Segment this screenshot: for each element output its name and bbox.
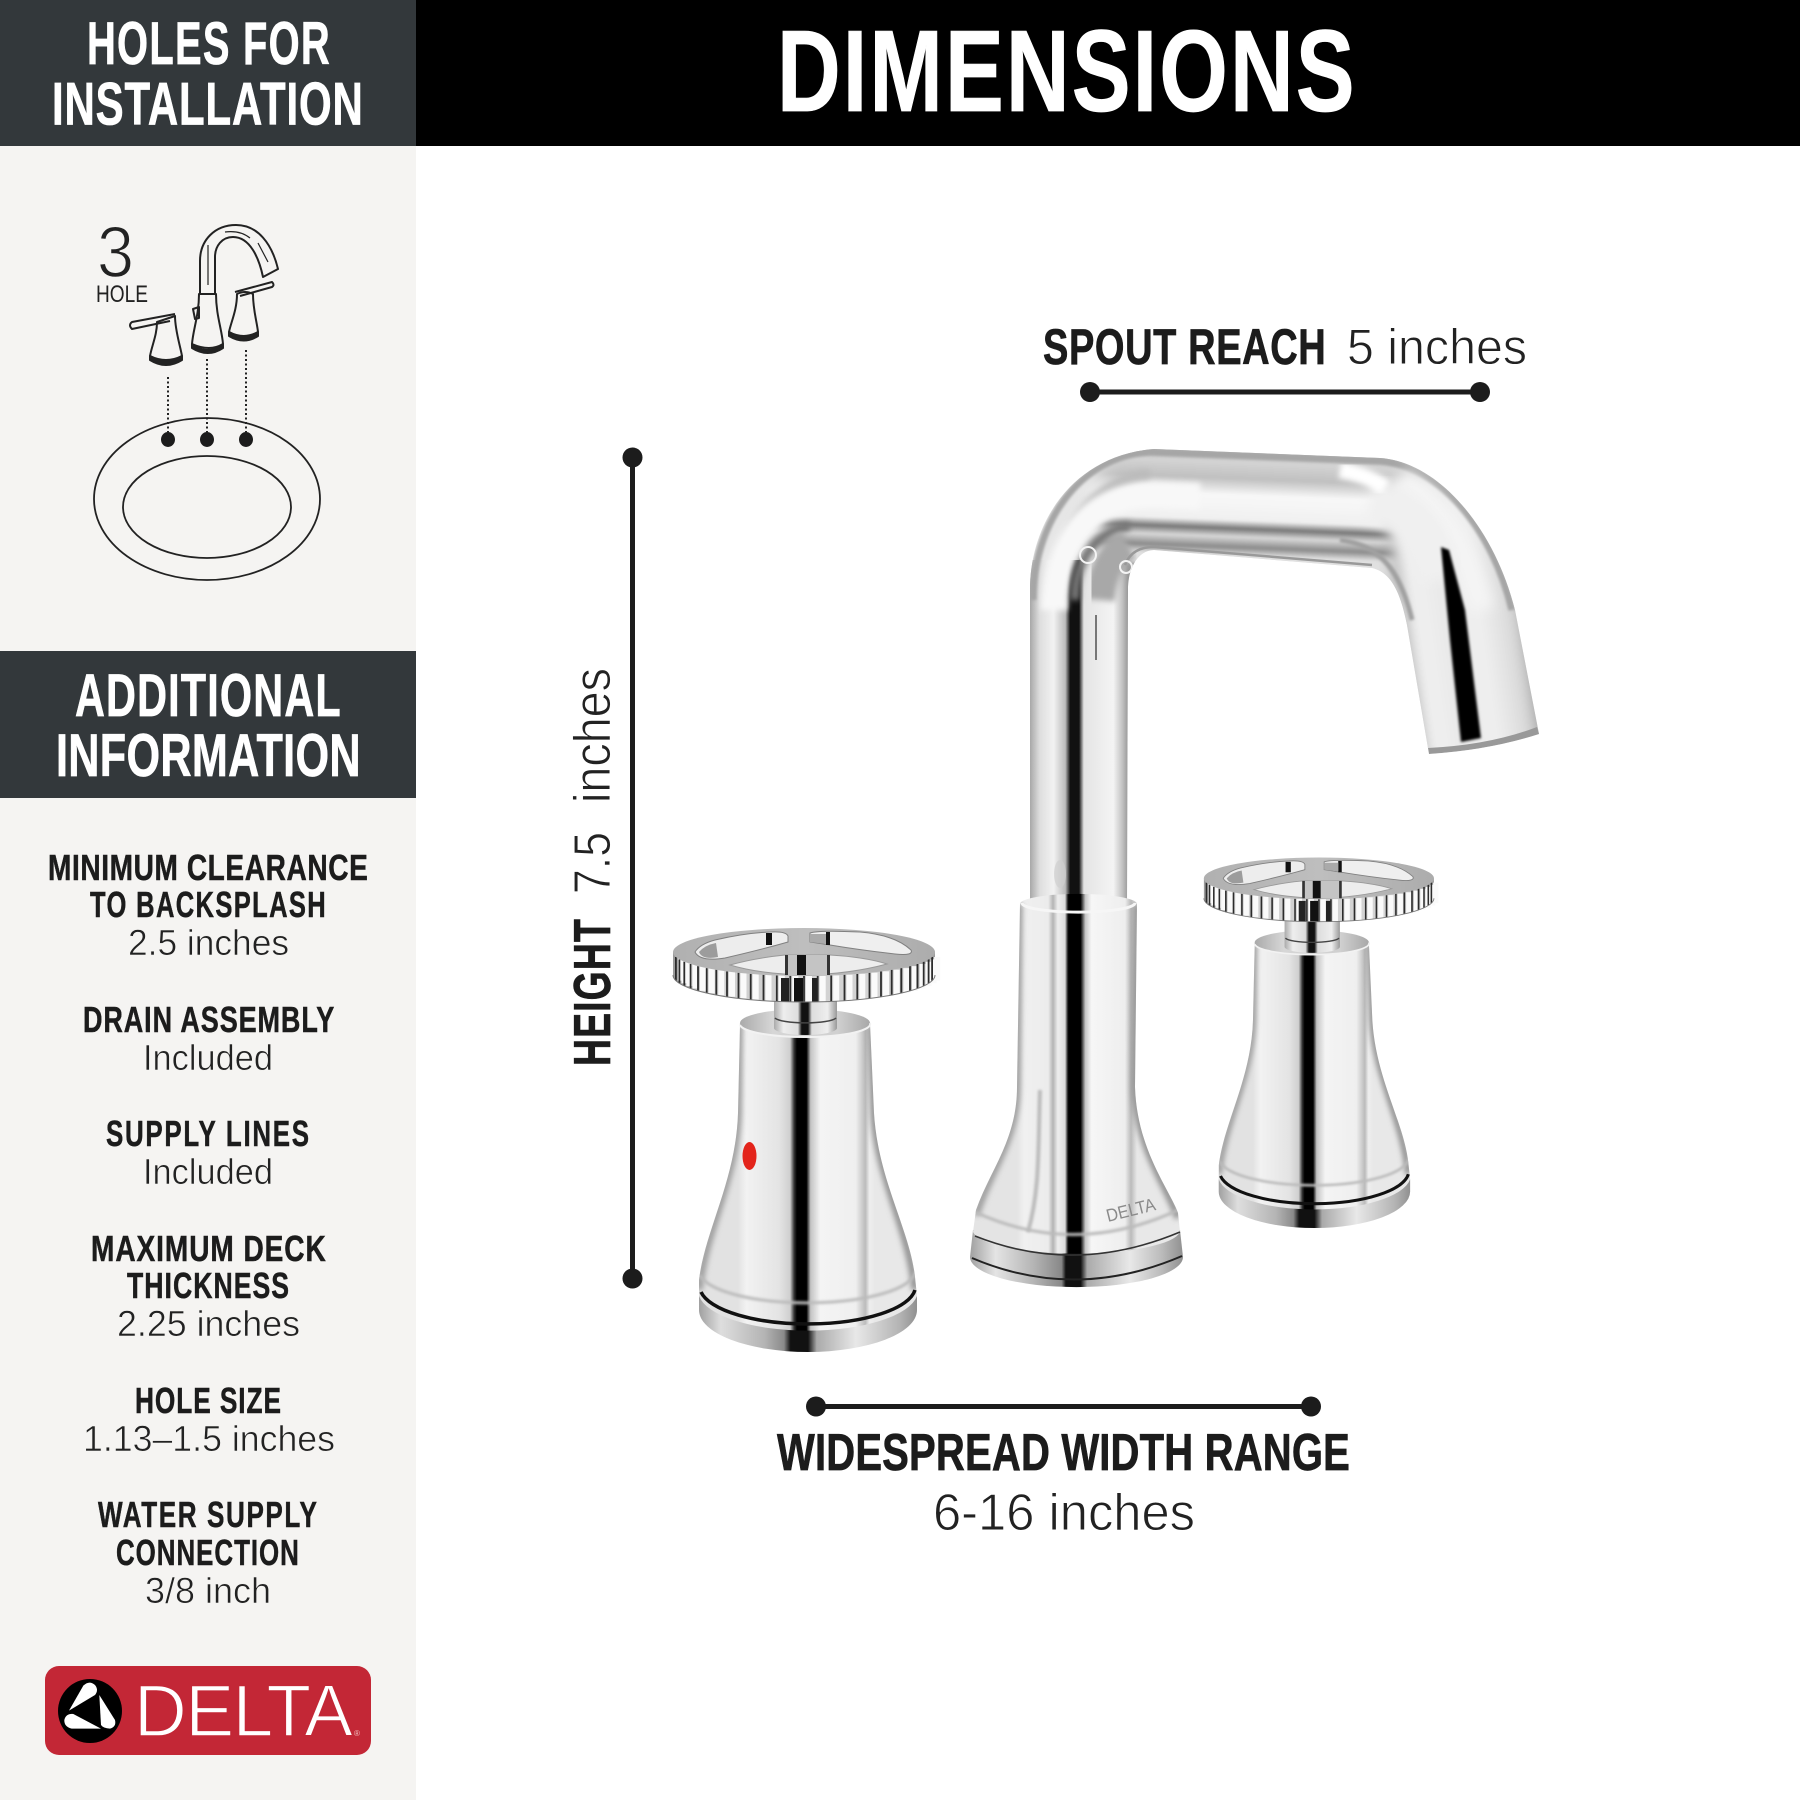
panel: additional information header xyxy=(0,651,416,798)
text block: minimum clearance: MINIMUM CLEARANCE xyxy=(48,848,368,888)
panel: holes for installation header xyxy=(0,0,416,146)
text block: hole size xyxy=(83,1380,335,1459)
text block: water supply connection: WATER SUPPLY xyxy=(98,1495,317,1535)
text block: maximum deck thickness: THICKNESS xyxy=(127,1265,289,1306)
dimension: height: inches xyxy=(564,668,622,803)
logo text on base: DELTA xyxy=(1104,1194,1157,1226)
text block: supply lines: Included xyxy=(143,1151,273,1192)
text block: maximum deck thickness: 2.25 inches xyxy=(117,1303,300,1344)
logo: Delta: DELTA xyxy=(134,1671,353,1752)
heading line one: HOLES FOR xyxy=(87,10,330,77)
title: DIMENSIONS xyxy=(777,6,1355,136)
dimension: spout reach: 5 inches xyxy=(1347,319,1527,375)
label: 3 hole: 3 xyxy=(97,213,134,293)
dimension: spout reach: SPOUT REACH xyxy=(1043,320,1326,375)
text block: maximum deck thickness xyxy=(91,1229,326,1344)
dimension: height xyxy=(563,448,642,1288)
right handle xyxy=(1204,858,1436,1228)
dimension: height: 7.5 xyxy=(564,832,622,894)
text block: minimum clearance xyxy=(48,848,368,963)
arrow: width measure xyxy=(806,1396,1321,1416)
dimension: widespread width range: WIDESPREAD WIDTH RANGE xyxy=(777,1423,1350,1481)
left handle xyxy=(673,928,937,1352)
text block: minimum clearance: TO BACKSPLASH xyxy=(90,885,326,925)
text block: drain assembly xyxy=(83,999,334,1078)
heading line two: INFORMATION xyxy=(56,723,361,790)
text block: water supply connection: 3/8 inch xyxy=(145,1570,271,1611)
text block: maximum deck thickness: MAXIMUM DECK xyxy=(91,1229,326,1269)
text block: water supply connection: CONNECTION xyxy=(116,1533,299,1573)
product: chrome faucet xyxy=(673,440,1560,1352)
logo: Delta: ® xyxy=(354,1729,360,1738)
text block: supply lines: SUPPLY LINES xyxy=(106,1114,309,1154)
text block: hole size: 1.13–1.5 inches xyxy=(83,1418,335,1459)
text block: water supply connection xyxy=(98,1495,317,1611)
heading line two: INSTALLATION xyxy=(52,70,363,137)
dimension: height: HEIGHT xyxy=(563,919,621,1066)
faucet base xyxy=(970,894,1183,1287)
icon: delta emblem xyxy=(58,1679,122,1743)
label: 3 hole xyxy=(96,213,148,308)
arrow: height measure xyxy=(622,448,642,1288)
dimension: spout reach xyxy=(1043,319,1527,402)
text block: drain assembly: DRAIN ASSEMBLY xyxy=(83,999,334,1040)
text block: hole size: HOLE SIZE xyxy=(135,1380,281,1421)
dotted guides xyxy=(168,350,246,433)
label: 3 hole: HOLE xyxy=(96,281,148,308)
spout xyxy=(1030,449,1539,898)
sink outline xyxy=(94,418,320,580)
heading line one: ADDITIONAL xyxy=(75,661,341,729)
hot indicator dot xyxy=(742,1142,756,1170)
arrow: spout reach measure xyxy=(1080,382,1490,402)
small faucet outline xyxy=(130,225,278,365)
panel: dimensions title bar xyxy=(416,0,1800,146)
text block: minimum clearance: 2.5 inches xyxy=(128,922,289,963)
mounting holes xyxy=(161,432,253,447)
icon: three hole faucet and sink diagram xyxy=(94,213,320,580)
panel: left sidebar xyxy=(0,0,416,1800)
dimension: widespread width range: 6-16 inches xyxy=(933,1484,1195,1542)
dimension: widespread width range xyxy=(777,1396,1350,1542)
text block: drain assembly: Included xyxy=(143,1037,273,1078)
text block: supply lines xyxy=(106,1114,309,1192)
logo: Delta xyxy=(45,1666,371,1755)
